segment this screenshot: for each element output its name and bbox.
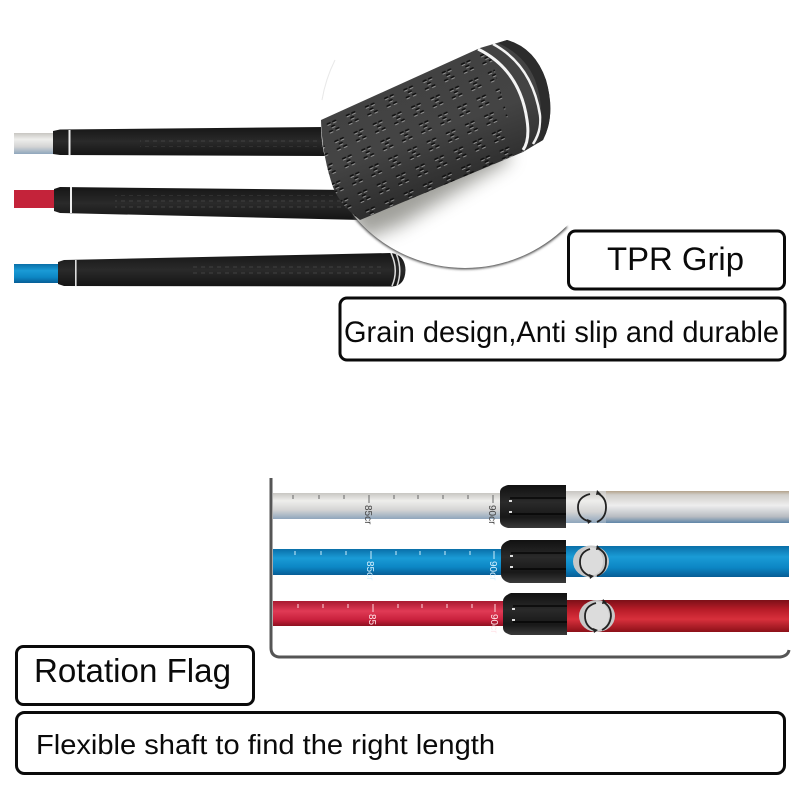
label: flexible shaft description	[16, 712, 784, 774]
red club shaft and grip	[14, 187, 362, 220]
blue shaft: 85cr	[364, 561, 375, 581]
blue shaft: 90cr	[487, 561, 498, 581]
black adjuster collars	[500, 485, 567, 635]
panel: rotation flag photo	[271, 478, 789, 657]
silver club shaft and grip	[14, 127, 325, 156]
silver shaft: 90cr	[486, 505, 497, 525]
red shaft: 90cr	[488, 614, 499, 634]
magnifier circle	[321, 40, 569, 272]
enlarged textured grip	[321, 40, 550, 220]
silver shaft	[273, 491, 789, 525]
panel: TPR grip photo	[14, 40, 569, 286]
label: grain design description: Grain design,Anti slip and durable	[344, 316, 779, 349]
blue club shaft and grip	[14, 253, 406, 286]
label: flexible shaft description: Flexible shaft to find the right length	[36, 729, 495, 760]
label: TPR Grip	[568, 231, 784, 289]
label: Rotation Flag	[16, 646, 254, 704]
shadow under enlarged grip	[353, 154, 518, 244]
red shaft	[273, 600, 789, 634]
label: Rotation Flag: Rotation Flag	[34, 652, 231, 689]
blue shaft	[273, 546, 789, 581]
photo card with shadow	[271, 478, 789, 657]
label: TPR Grip: TPR Grip	[607, 241, 744, 277]
red shaft: 85	[366, 614, 377, 626]
silver shaft: 85cr	[362, 505, 373, 525]
rotation arrow marks	[566, 490, 615, 633]
label: grain design description	[340, 298, 785, 360]
